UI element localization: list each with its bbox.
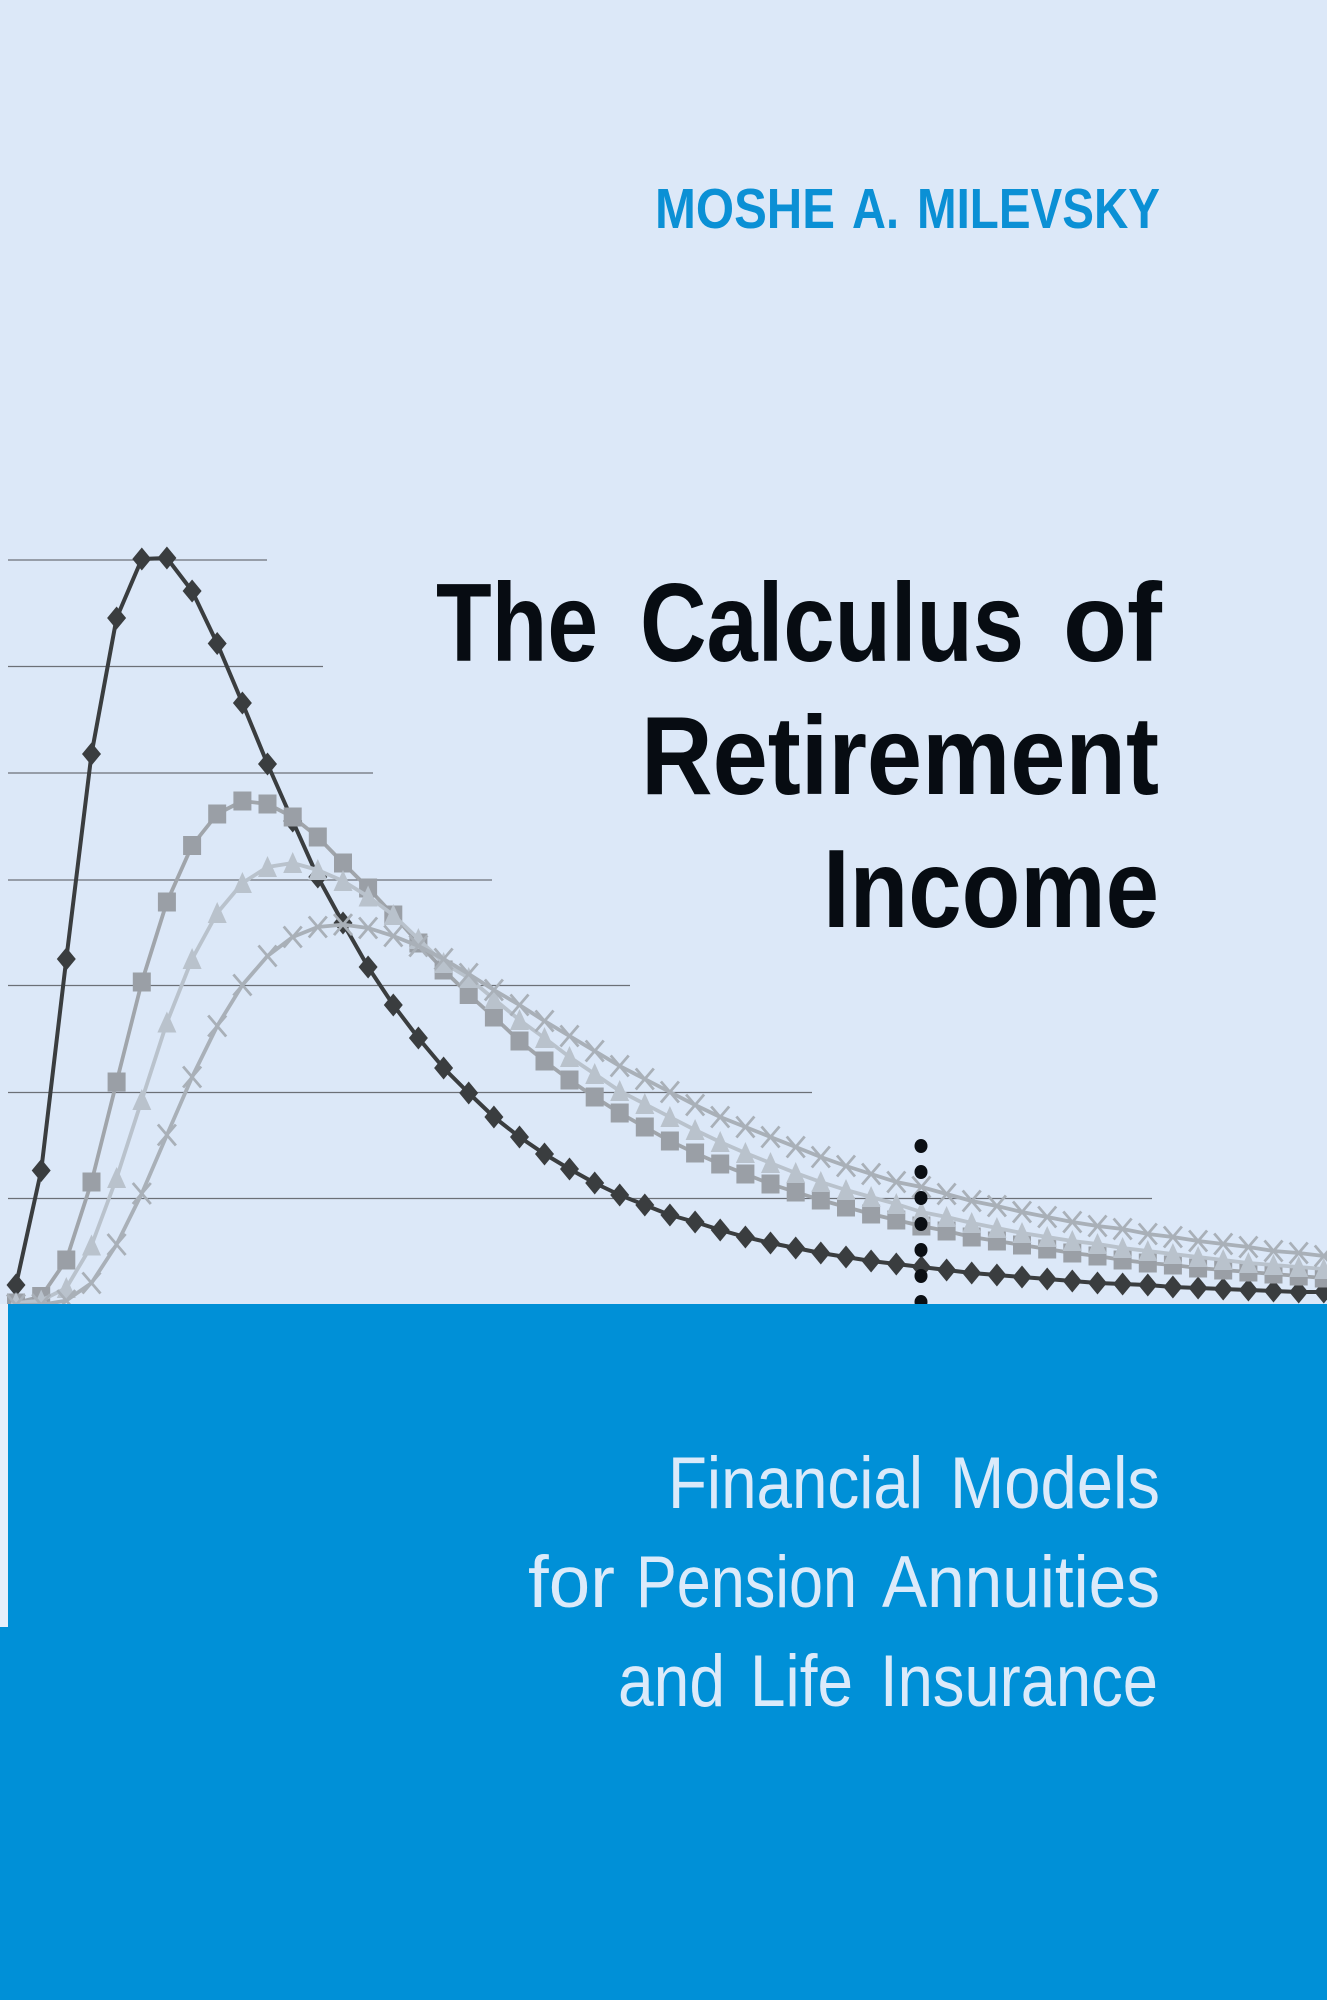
author name: MOSHE <box>655 177 835 241</box>
curve: grey squares <box>16 801 1327 1303</box>
subtitle: and <box>618 1641 725 1722</box>
gridlines <box>8 560 1152 1198</box>
subtitle: Insurance <box>880 1641 1158 1722</box>
title: Calculus <box>640 561 1024 685</box>
subtitle: Life <box>750 1641 853 1722</box>
subtitle: Pension <box>636 1542 857 1623</box>
subtitle: Financial <box>668 1443 923 1524</box>
title <box>436 561 1163 951</box>
author name <box>655 177 1160 241</box>
curve: dark diamonds <box>16 558 1327 1293</box>
title: of <box>1063 561 1163 685</box>
left edge strip <box>0 1304 8 1627</box>
subtitle: Annuities <box>882 1542 1160 1623</box>
blue lower panel <box>0 1304 1327 2000</box>
chart: four hump-shaped curves with gridlines <box>8 558 1327 1309</box>
curve: light triangles <box>16 863 1327 1303</box>
dotted vertical marker <box>914 1139 928 1309</box>
subtitle: for <box>528 1542 615 1623</box>
subtitle: Models <box>950 1443 1160 1524</box>
author name: A. <box>852 177 899 241</box>
title: The <box>436 561 598 685</box>
author name: MILEVSKY <box>917 177 1160 241</box>
curve: crosses <box>16 925 1327 1305</box>
title: Income <box>823 827 1159 951</box>
subtitle <box>528 1443 1160 1722</box>
title: Retirement <box>641 694 1159 818</box>
